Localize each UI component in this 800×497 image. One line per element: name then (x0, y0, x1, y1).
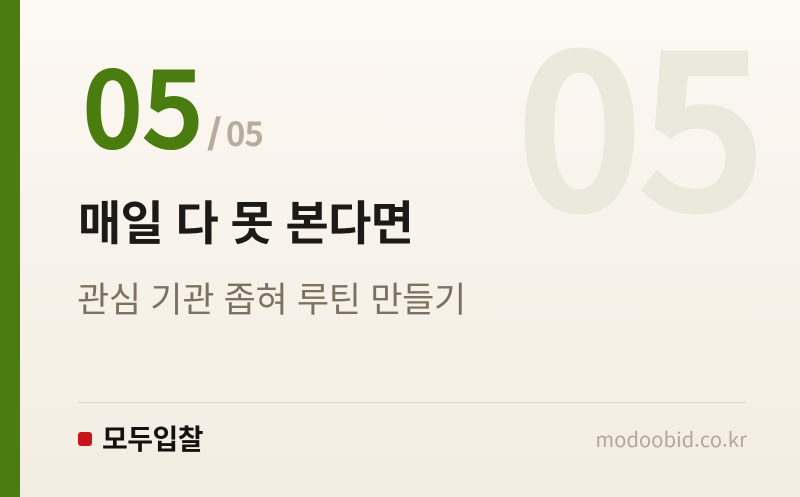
slide total: /05 (208, 108, 263, 156)
brand marker (78, 432, 92, 446)
divider (78, 402, 746, 403)
website url: modoobid.co.kr (596, 424, 747, 453)
slide number: 05 (84, 30, 204, 176)
heading: 매일 다 못 본다면 (78, 185, 413, 254)
brand (78, 418, 203, 458)
brand name: 모두입찰 (102, 418, 203, 458)
subtitle: 관심 기관 좁혀 루틴 만들기 (77, 272, 466, 323)
left accent bar (0, 0, 20, 497)
